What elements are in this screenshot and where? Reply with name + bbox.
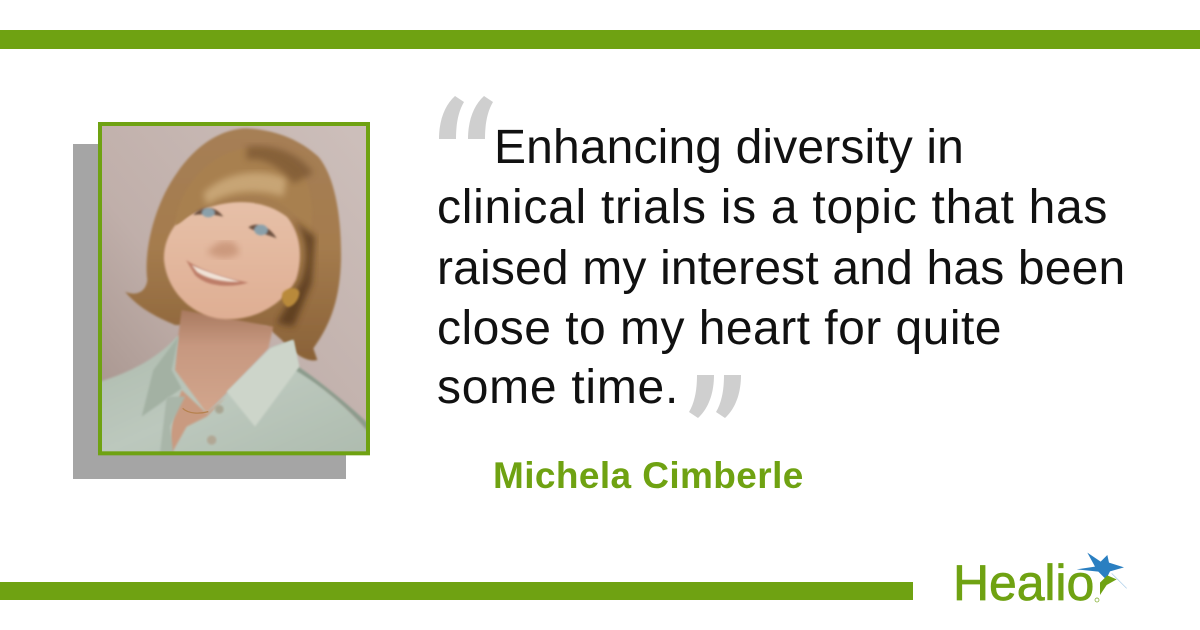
collar [227,340,299,427]
smile [186,260,248,286]
eyes [193,208,277,238]
face [164,202,300,319]
quote text: Enhancing diversity in [494,121,964,174]
neck [173,310,273,413]
buttons [215,405,224,414]
hair back [125,128,341,360]
top green bar [0,30,1200,49]
quote text: close to my heart for quite [437,302,1002,355]
bangs [175,214,191,226]
bottom green bar [0,582,913,600]
attribution name: Michela Cimberle [493,455,804,496]
quote text: clinical trials is a topic that has [437,181,1108,234]
quote text: raised my interest and has been [437,242,1125,295]
grey offset panel behind portrait [73,144,346,479]
neck opening [170,390,224,451]
quote text: some time. [437,361,679,414]
shirt [100,335,368,453]
Healio logo [953,552,1127,611]
earring [282,288,299,307]
logo wordmark: Healio [953,555,1094,611]
quote text [437,121,1125,414]
portrait photo with green frame [98,122,370,456]
nose shadow [207,242,240,258]
